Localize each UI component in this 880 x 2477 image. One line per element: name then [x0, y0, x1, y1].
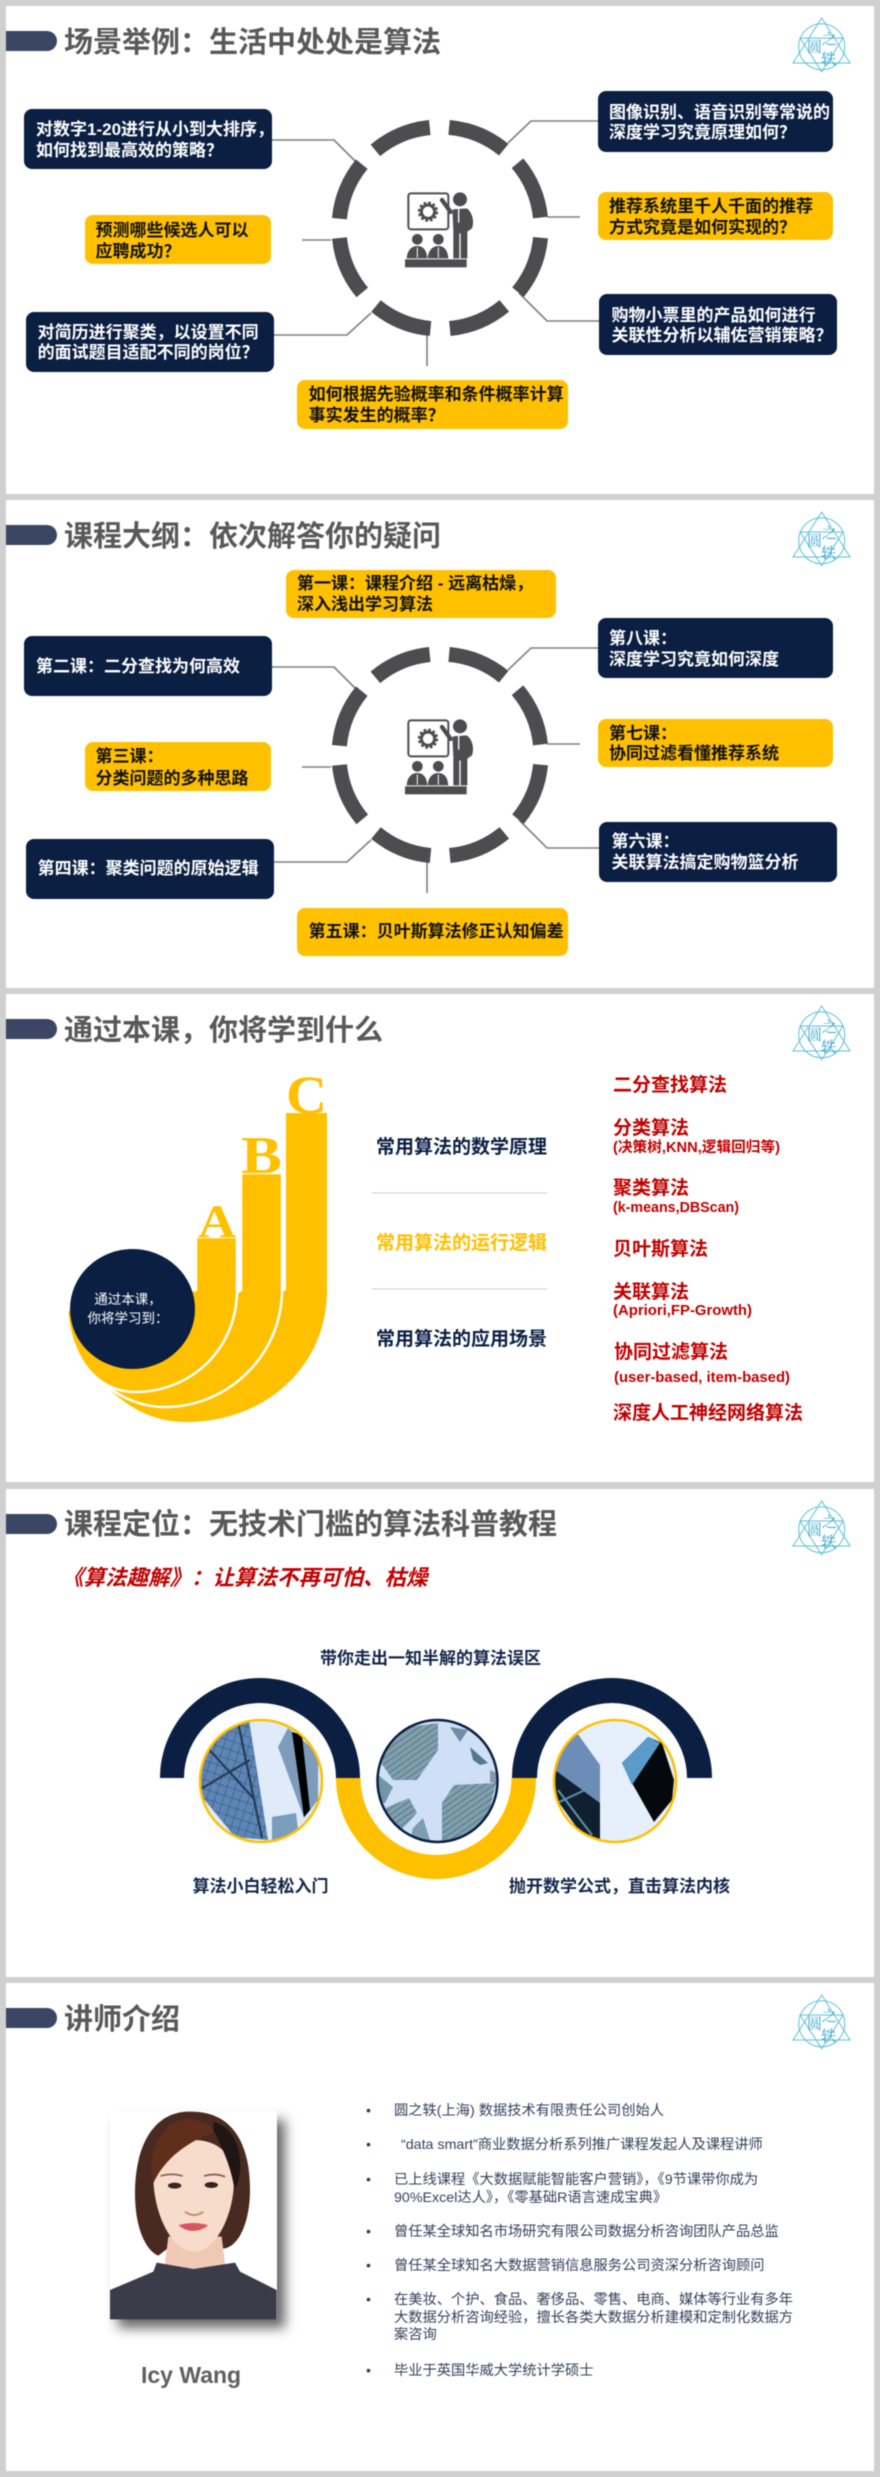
bullet list: 大数据分析咨询经验，擅长各类大数据分析建模和定制化数据方 [394, 2308, 793, 2326]
algorithm list [613, 1073, 803, 1424]
algorithm list: 深度人工神经网络算法 [613, 1401, 803, 1424]
box: lesson 5 [297, 908, 568, 956]
bullet list: • [366, 2137, 371, 2153]
bullet list: 案咨询 [394, 2325, 437, 2343]
bullet list: 90%Excel达人》，《零基础R语言速成宝典》 [394, 2189, 667, 2206]
box: deep learning: 图像识别、语音识别等常说的 [609, 102, 830, 122]
connector lines [272, 121, 599, 366]
algorithm list: (user-based, item-based) [614, 1370, 790, 1386]
icon: presenter [405, 192, 473, 267]
bullet list: “data smart”商业数据分析系列推广课程发起人及课程讲师 [401, 2136, 763, 2153]
box: lesson 8: 第八课： [609, 628, 677, 648]
algorithm list: (决策树,KNN,逻辑回归等) [613, 1138, 780, 1156]
middle list: 常用算法的应用场景 [376, 1327, 547, 1350]
box: resume clustering [26, 312, 274, 372]
logo [793, 512, 850, 566]
box: recommender: 方式究竟是如何实现的？ [609, 217, 796, 237]
subtitle: 《算法趣解》：让算法不再可怕、枯燥 [62, 1566, 430, 1590]
bullet list: • [366, 2292, 371, 2308]
box: lesson 3: 分类问题的多种思路 [96, 768, 248, 788]
algorithm list: 聚类算法 [613, 1176, 689, 1199]
bullet list [366, 2102, 793, 2379]
logo [793, 1501, 850, 1555]
panel: instructor [6, 1983, 874, 2471]
logo: 轶 [821, 542, 836, 563]
bullet list: 圆之轶(上海) 数据技术有限责任公司创始人 [394, 2102, 664, 2119]
title: 讲师介绍 [64, 2003, 180, 2036]
logo: 圆 [807, 2013, 822, 2034]
bullet list: • [366, 2258, 371, 2274]
title: 课程定位：无技术门槛的算法科普教程 [64, 1508, 557, 1541]
navy circle [70, 1249, 195, 1369]
box: resume clustering: 的面试题目适配不同的岗位？ [38, 342, 259, 362]
connector lines [272, 648, 599, 893]
ABC J-curve chart: A [198, 1196, 236, 1248]
box: lesson 5: 第五课：贝叶斯算法修正认知偏差 [309, 921, 564, 941]
panel: course positioning [6, 1489, 874, 1977]
title: 通过本课，你将学到什么 [64, 1014, 383, 1047]
middle list [372, 1135, 547, 1350]
logo: 之 [822, 1511, 837, 1532]
box: association: 购物小票里的产品如何进行 [612, 306, 816, 325]
middle list: 常用算法的数学原理 [376, 1135, 547, 1158]
bullet list: 在美妆、个护、食品、奢侈品、零售、电商、媒体等行业有多年 [394, 2290, 793, 2308]
box: lesson 7: 第七课： [609, 723, 677, 743]
algorithm list: 二分查找算法 [613, 1073, 727, 1096]
algorithm list: 关联算法 [613, 1280, 689, 1303]
panel: what you will learn [6, 994, 874, 1482]
title: 场景举例：生活中处处是算法 [64, 26, 441, 59]
photo: left building [198, 1718, 324, 1844]
logo: 圆 [807, 36, 822, 57]
algorithm list: 协同过滤算法 [614, 1340, 728, 1363]
ABC J-curve chart [67, 1065, 327, 1422]
bullet list: 曾任某全球知名大数据营销信息服务公司资深分析咨询顾问 [394, 2256, 765, 2274]
header bar [6, 2008, 57, 2028]
navy circle: 通过本课， [94, 1292, 162, 1307]
box: lesson 3: 第三课： [96, 746, 164, 766]
name: Icy Wang [141, 2362, 241, 2388]
box: candidates: 应聘成功？ [96, 241, 180, 261]
box: sort question [24, 109, 274, 169]
icon: presenter [405, 719, 473, 794]
arcs [160, 1678, 712, 1879]
bullet list: 已上线课程《大数据赋能智能客户营销》，《9节课带你成为 [394, 2171, 758, 2188]
box: lesson 1: 第一课：课程介绍 - 远离枯燥， [297, 573, 533, 593]
box: bayes: 事实发生的概率？ [309, 405, 445, 425]
logo: 圆 [807, 530, 822, 551]
bullet list: • [366, 2172, 371, 2188]
box: lesson 6: 第六课： [612, 831, 680, 851]
bullet list: • [366, 2103, 371, 2119]
box: lesson 4 [26, 839, 274, 899]
box: association [599, 294, 837, 355]
box: deep learning: 深度学习究竟原理如何？ [609, 122, 796, 142]
algorithm list: (k-means,DBScan) [613, 1200, 739, 1216]
ring [339, 127, 541, 329]
box: lesson 2 [24, 636, 272, 696]
header bar [6, 1514, 57, 1534]
box: sort question: 对数字1-20进行从小到大排序， [36, 119, 274, 139]
box: bayes [297, 380, 568, 429]
box: lesson 1 [286, 570, 556, 618]
box: lesson 6 [599, 822, 837, 882]
logo: 轶 [821, 2025, 836, 2046]
box: recommender: 推荐系统里千人千面的推荐 [609, 196, 813, 216]
algorithm list: 贝叶斯算法 [613, 1237, 708, 1260]
logo: 轶 [821, 48, 836, 69]
algorithm list: (Apriori,FP-Growth) [613, 1303, 752, 1319]
logo [793, 18, 850, 72]
middle list: 常用算法的运行逻辑 [376, 1231, 547, 1254]
bottom captions: 算法小白轻松入门 [192, 1876, 328, 1896]
box: candidates: 预测哪些候选人可以 [96, 221, 248, 240]
header bar [6, 525, 57, 545]
ring [339, 654, 541, 856]
photo: portrait [110, 2111, 277, 2319]
header bar [6, 31, 57, 51]
title: 课程大纲：依次解答你的疑问 [64, 520, 441, 553]
logo: 之 [822, 28, 837, 49]
logo: 之 [822, 1016, 837, 1037]
box: association: 关联性分析以辅佐营销策略？ [612, 325, 832, 345]
box: candidates [85, 215, 271, 264]
box: lesson 1: 深入浅出学习算法 [297, 594, 433, 614]
logo: 之 [822, 2005, 837, 2026]
logo: 之 [822, 522, 837, 543]
box: lesson 7: 协同过滤看懂推荐系统 [609, 743, 779, 763]
logo [793, 1995, 850, 2049]
algorithm list: 分类算法 [613, 1116, 689, 1139]
ABC J-curve chart: C [286, 1065, 327, 1125]
box: lesson 8 [598, 618, 833, 678]
box: lesson 3 [85, 742, 271, 791]
logo: 圆 [807, 1024, 822, 1045]
box: sort question: 如何找到最高效的策略？ [36, 140, 223, 160]
navy circle: 你将学习到： [88, 1311, 168, 1326]
box: lesson 6: 关联算法搞定购物篮分析 [612, 852, 798, 872]
logo: 轶 [821, 1036, 836, 1057]
box: lesson 4: 第四课：聚类问题的原始逻辑 [38, 858, 259, 878]
box: lesson 7 [598, 719, 833, 767]
panel: scenario examples [6, 6, 874, 494]
panel: course outline [6, 500, 874, 988]
box: bayes: 如何根据先验概率和条件概率计算 [309, 384, 564, 404]
photo: right building [550, 1715, 680, 1845]
box: deep learning [598, 91, 833, 152]
bullet list: • [366, 2224, 371, 2240]
box: lesson 8: 深度学习究竟如何深度 [609, 649, 779, 669]
box: recommender [598, 192, 833, 240]
box: lesson 2: 第二课：二分查找为何高效 [36, 656, 240, 676]
logo [793, 1006, 850, 1060]
bullet list: 曾任某全球知名市场研究有限公司数据分析咨询团队产品总监 [394, 2222, 779, 2240]
box: resume clustering: 对简历进行聚类，以设置不同 [38, 322, 259, 342]
header bar [6, 1019, 57, 1039]
logo: 圆 [807, 1519, 822, 1540]
ABC J-curve chart: B [241, 1127, 282, 1185]
bullet list: 毕业于英国华威大学统计学硕士 [394, 2361, 594, 2379]
photo: center building [372, 1715, 502, 1845]
logo: 轶 [821, 1531, 836, 1552]
panel: course positioning: 抛开数学公式，直击算法内核 [509, 1876, 730, 1896]
bullet list: • [366, 2363, 371, 2379]
top caption: 带你走出一知半解的算法误区 [320, 1648, 541, 1668]
